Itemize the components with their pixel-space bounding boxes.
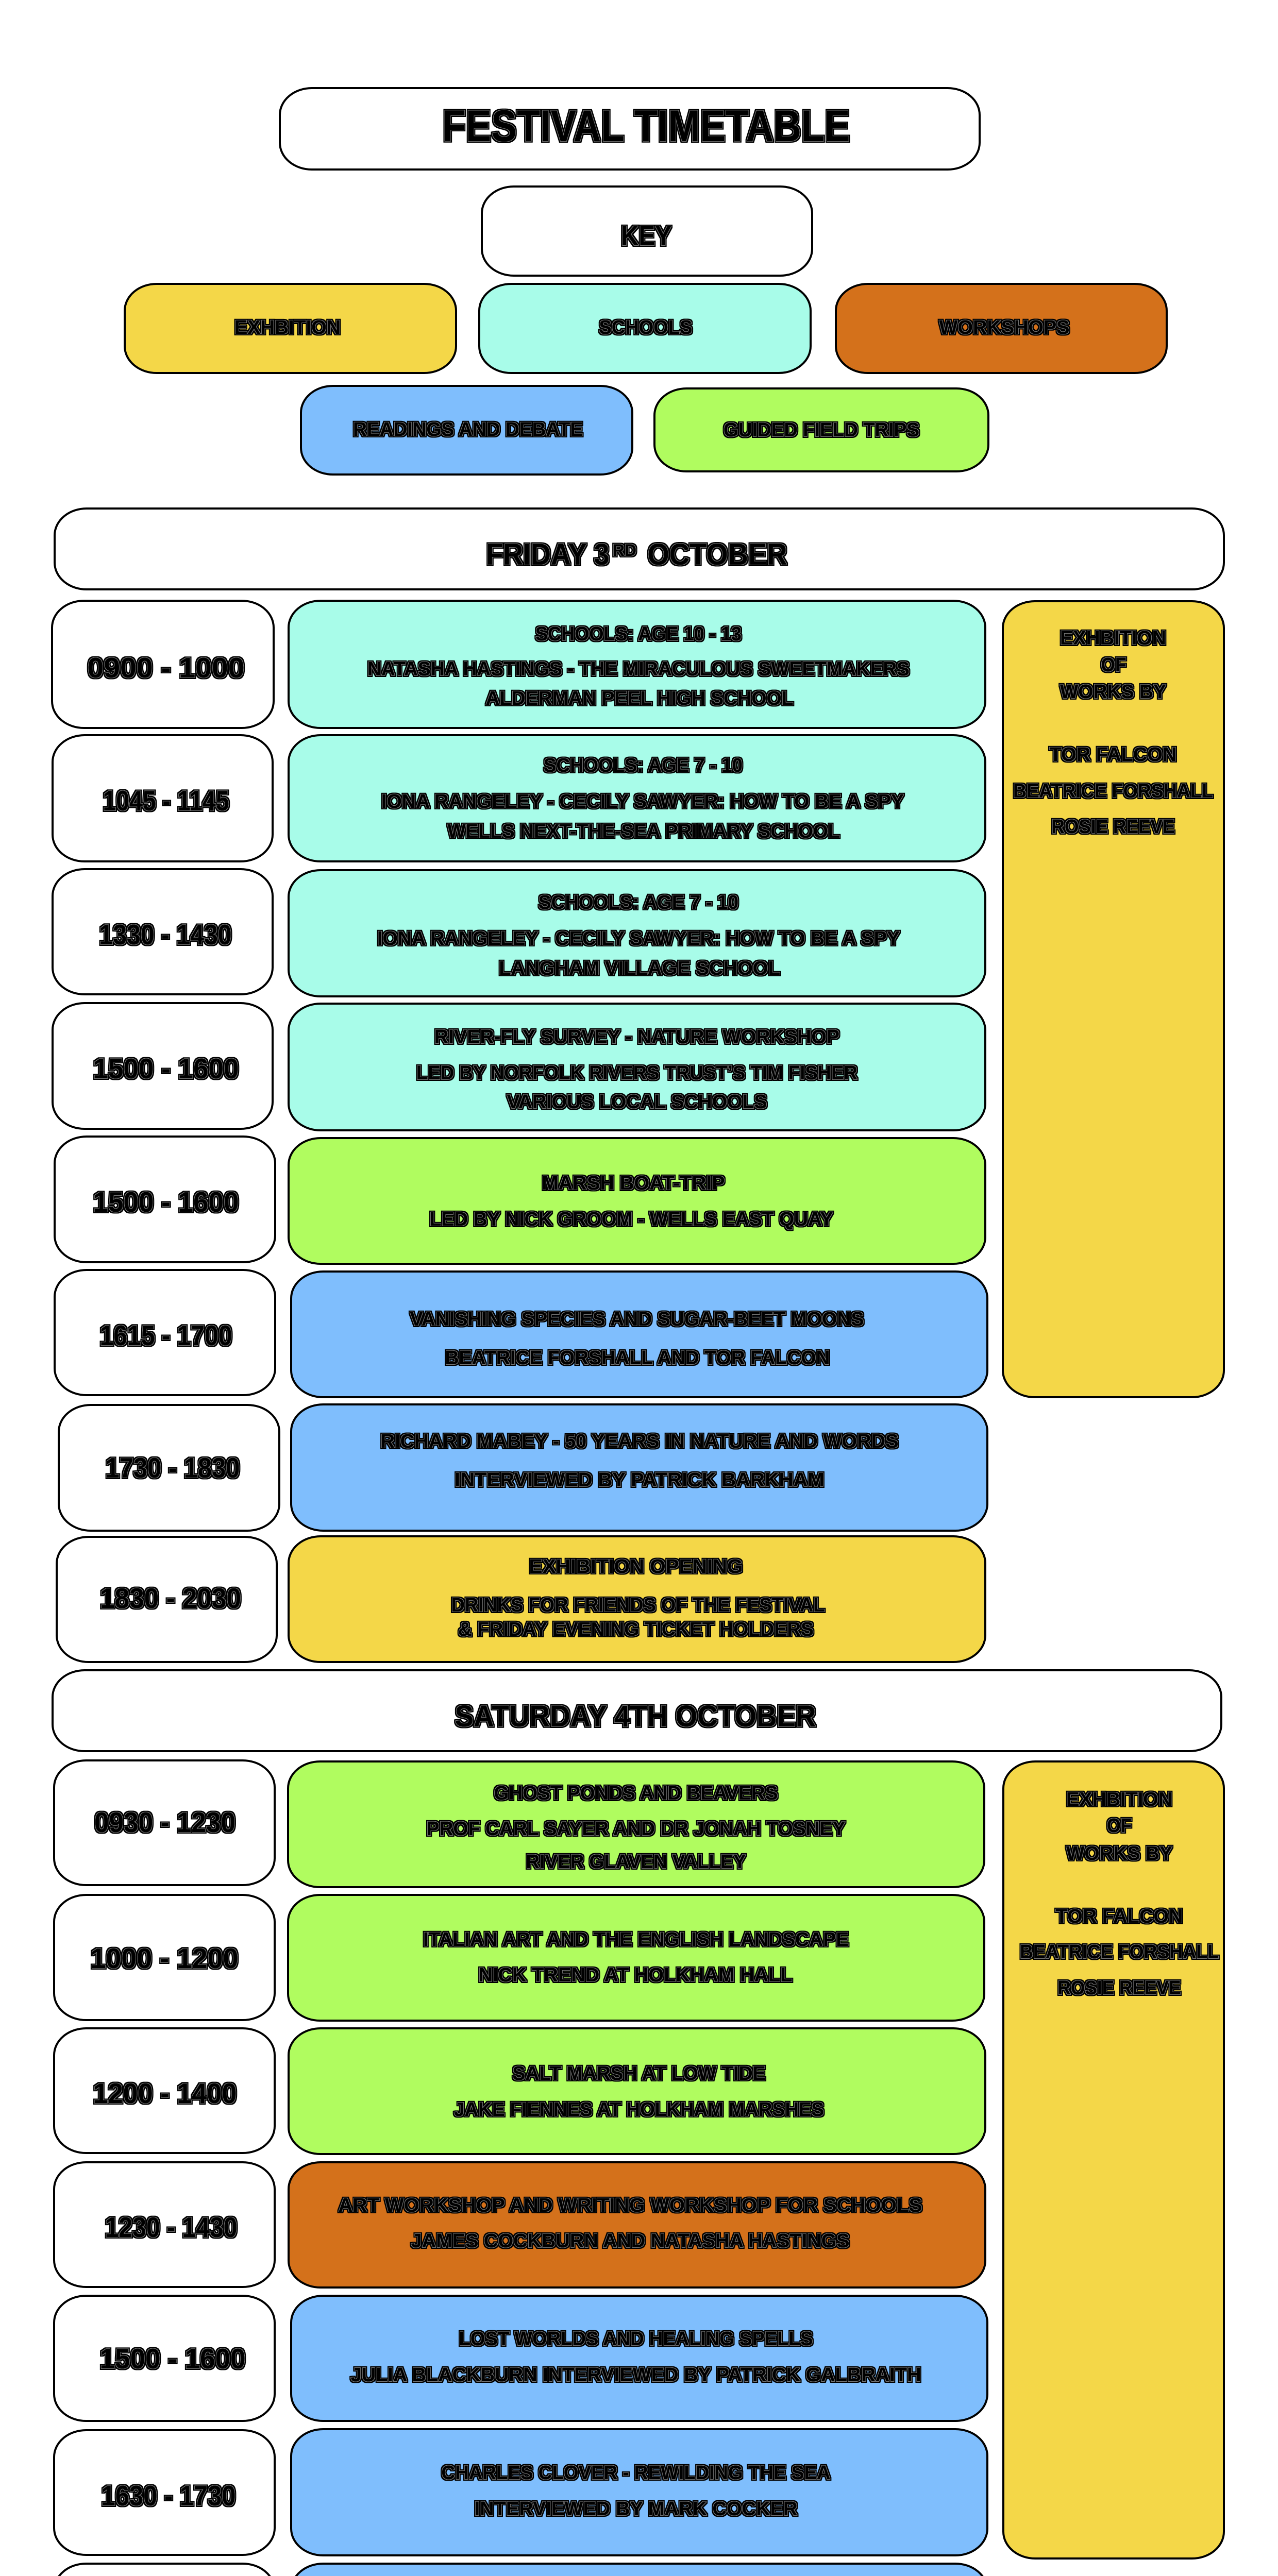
heading: Friday 3rd October: RD — [613, 541, 636, 560]
time: 1330 - 1430: 1330 - 1430 — [99, 919, 232, 951]
time: 1500 - 1600 Saturday — [54, 2296, 275, 2421]
time: 1615 - 1700 — [55, 1270, 275, 1395]
session: schools age 10-13 — [289, 601, 985, 728]
panel: Friday exhibition: TOR FALCON — [1049, 744, 1177, 766]
time: 1045 - 1145: 1045 - 1145 — [103, 785, 229, 817]
panel: Friday exhibition: ROSIE REEVE — [1051, 816, 1175, 838]
session: Richard Mabey: INTERVIEWED BY PATRICK BARKHAM — [455, 1469, 825, 1491]
session: Richard Mabey: RICHARD MABEY - 50 YEARS IN NATURE AND WORDS — [380, 1431, 899, 1452]
panel: Saturday exhibition — [1003, 1761, 1224, 2558]
session: ghost ponds and beavers: RIVER GLAVEN VALLEY — [526, 1851, 746, 1873]
session: Charles Clover — [291, 2429, 987, 2555]
session: river-fly survey: LED BY NORFOLK RIVERS TRUST’S TIM FISHER — [416, 1062, 857, 1084]
session: ghost ponds and beavers: GHOST PONDS AND BEAVERS — [494, 1783, 778, 1804]
key panel — [125, 187, 1167, 474]
time: 1500 - 1600 boat trip: 1500 - 1600 — [93, 1186, 239, 1218]
session: marsh boat-trip: MARSH BOAT-TRIP — [542, 1173, 725, 1194]
session: vanishing species — [291, 1272, 987, 1397]
key: guided field trips: GUIDED FIELD TRIPS — [724, 419, 919, 441]
session: lost worlds: JULIA BLACKBURN INTERVIEWED BY PATRICK GALBRAITH — [350, 2364, 921, 2386]
key: readings and debate — [301, 386, 632, 474]
panel: Saturday exhibition: BEATRICE FORSHALL — [1020, 1941, 1219, 1963]
session: marsh boat-trip — [289, 1138, 985, 1264]
session: Italian art: NICK TREND AT HOLKHAM HALL — [478, 1964, 793, 1986]
panel: Friday exhibition: BEATRICE FORSHALL — [1013, 781, 1213, 802]
session: salt marsh — [289, 2028, 985, 2154]
session: schools age 10-13: ALDERMAN PEEL HIGH SCHOOL — [485, 688, 794, 709]
time: 1200 - 1400 — [54, 2028, 275, 2153]
heading: Friday 3rd October — [55, 509, 1224, 589]
session: vanishing species: BEATRICE FORSHALL AND TOR FALCON — [445, 1347, 830, 1369]
key: workshops — [836, 284, 1167, 373]
time: 1045 - 1145 — [53, 735, 273, 861]
session: Richard Mabey — [291, 1404, 987, 1531]
time: 1200 - 1400: 1200 - 1400 — [93, 2077, 237, 2109]
session: Italian art — [288, 1895, 984, 2021]
key: schools: SCHOOLS — [599, 317, 693, 338]
session: schools age 7-10 Wells: WELLS NEXT-THE-SEA PRIMARY SCHOOL — [447, 821, 840, 842]
time: 1500 - 1600 Saturday: 1500 - 1600 — [100, 2343, 245, 2375]
session: lost worlds — [291, 2296, 987, 2421]
time: 1800 - 1900 — [54, 2564, 275, 2576]
time: 1630 - 1730: 1630 - 1730 — [101, 2480, 236, 2512]
heading: Saturday 4th October: SATURDAY 4TH OCTOBER — [455, 1700, 816, 1733]
panel: Friday exhibition — [1003, 601, 1224, 1397]
session: exhibition opening: DRINKS FOR FRIENDS OF THE FESTIVAL — [451, 1595, 825, 1616]
session: art and writing workshop: ART WORKSHOP AND WRITING WORKSHOP FOR SCHOOLS — [338, 2195, 922, 2216]
session: Charles Clover: INTERVIEWED BY MARK COCKER — [474, 2498, 798, 2520]
panel: Saturday exhibition: WORKS BY — [1066, 1843, 1172, 1865]
time: 1230 - 1430: 1230 - 1430 — [105, 2211, 237, 2243]
time: 1000 - 1200: 1000 - 1200 — [91, 1942, 238, 1974]
key: exhibition — [125, 284, 456, 373]
time: 0930 - 1230: 0930 - 1230 — [94, 1806, 236, 1838]
time: 1330 - 1430 — [53, 869, 273, 994]
session: schools age 7-10 Wells: SCHOOLS: AGE 7 - 10 — [544, 755, 743, 776]
session: Charles Clover: CHARLES CLOVER - REWILDING THE SEA — [441, 2462, 831, 2484]
key heading — [482, 187, 812, 276]
key: exhibition: EXHBITION — [234, 317, 341, 338]
panel: Friday exhibition: OF — [1101, 654, 1126, 676]
time: 0900 - 1000: 0900 - 1000 — [88, 652, 244, 684]
heading: Friday 3rd October: FRIDAY 3 — [486, 538, 609, 571]
session: schools age 7-10 Wells: IONA RANGELEY - CECILY SAWYER: HOW TO BE A SPY — [381, 791, 904, 812]
session: schools age 7-10 Langham: LANGHAM VILLAGE SCHOOL — [499, 958, 780, 979]
session: marsh boat-trip: LED BY NICK GROOM - WELLS EAST QUAY — [430, 1209, 833, 1230]
session: ghost ponds and beavers — [288, 1761, 984, 1887]
key heading: KEY — [621, 221, 671, 251]
panel: Saturday exhibition: OF — [1107, 1815, 1132, 1837]
time: 1730 - 1830 — [59, 1405, 279, 1531]
panel: Saturday exhibition: TOR FALCON — [1055, 1906, 1183, 1927]
heading: Friday 3rd October: OCTOBER — [647, 538, 787, 571]
session: lost worlds: LOST WORLDS AND HEALING SPELLS — [459, 2328, 813, 2350]
panel: Friday exhibition: WORKS BY — [1060, 681, 1166, 703]
heading: Saturday 4th October — [53, 1670, 1221, 1751]
time: 1230 - 1430 — [54, 2162, 275, 2287]
session: schools age 7-10 Wells — [289, 735, 985, 861]
time: 1830 - 2030: 1830 - 2030 — [100, 1582, 241, 1614]
key: workshops: WORKSHOPS — [939, 317, 1070, 338]
time: 1500 - 1600: 1500 - 1600 — [93, 1053, 239, 1084]
panel: Friday exhibition: EXHBITION — [1060, 628, 1166, 649]
session: exhibition opening: & FRIDAY EVENING TICKET HOLDERS — [458, 1619, 814, 1640]
session: river-fly survey: VARIOUS LOCAL SCHOOLS — [507, 1091, 767, 1113]
time: 1615 - 1700: 1615 - 1700 — [100, 1319, 232, 1351]
time: 1830 - 2030 — [57, 1537, 277, 1662]
title — [280, 88, 980, 170]
time: 1500 - 1600 — [53, 1003, 273, 1129]
panel: Saturday exhibition: EXHBITION — [1066, 1789, 1172, 1810]
session: schools age 7-10 Langham: SCHOOLS: AGE 7 - 10 — [539, 892, 738, 913]
session: schools age 10-13: NATASHA HASTINGS - THE MIRACULOUS SWEETMAKERS — [367, 658, 910, 680]
time: 1500 - 1600 boat trip — [55, 1137, 275, 1262]
session: river-fly survey: RIVER-FLY SURVEY - NATURE WORKSHOP — [434, 1026, 839, 1048]
session: art and writing workshop: JAMES COCKBURN AND NATASHA HASTINGS — [411, 2230, 849, 2252]
key: guided field trips — [654, 388, 988, 471]
session: schools age 10-13: SCHOOLS: AGE 10 - 13 — [535, 623, 742, 645]
session: salt marsh: SALT MARSH AT LOW TIDE — [512, 2063, 766, 2084]
key: schools — [479, 284, 811, 373]
time: 0930 - 1230 — [54, 1760, 275, 1885]
time: 1730 - 1830: 1730 - 1830 — [105, 1452, 240, 1484]
panel: Saturday exhibition: ROSIE REEVE — [1057, 1977, 1181, 1999]
session: exhibition opening — [289, 1536, 985, 1662]
session: salt marsh: JAKE FIENNES AT HOLKHAM MARSHES — [454, 2099, 824, 2121]
session: vanishing species: VANISHING SPECIES AND SUGAR-BEET MOONS — [410, 1309, 864, 1330]
session: Italian art: ITALIAN ART AND THE ENGLISH LANDSCAPE — [423, 1929, 849, 1951]
session: schools age 7-10 Langham: IONA RANGELEY - CECILY SAWYER: HOW TO BE A SPY — [377, 928, 900, 950]
session: ghost ponds and beavers: PROF CARL SAYER AND DR JONAH TOSNEY — [427, 1818, 845, 1840]
session: river-fly survey — [289, 1004, 985, 1130]
title: FESTIVAL TIMETABLE — [442, 101, 850, 151]
session: exhibition opening: EXHIBITION OPENING — [529, 1556, 743, 1578]
session: Alan Hollinghurst — [291, 2564, 987, 2576]
time: 1630 - 1730 — [54, 2430, 275, 2555]
session: art and writing workshop — [289, 2162, 985, 2287]
time: 1000 - 1200 — [54, 1895, 275, 2020]
key: readings and debate: READINGS AND DEBATE — [353, 419, 583, 440]
session: schools age 7-10 Langham — [289, 870, 985, 996]
time: 0900 - 1000 — [52, 601, 274, 728]
